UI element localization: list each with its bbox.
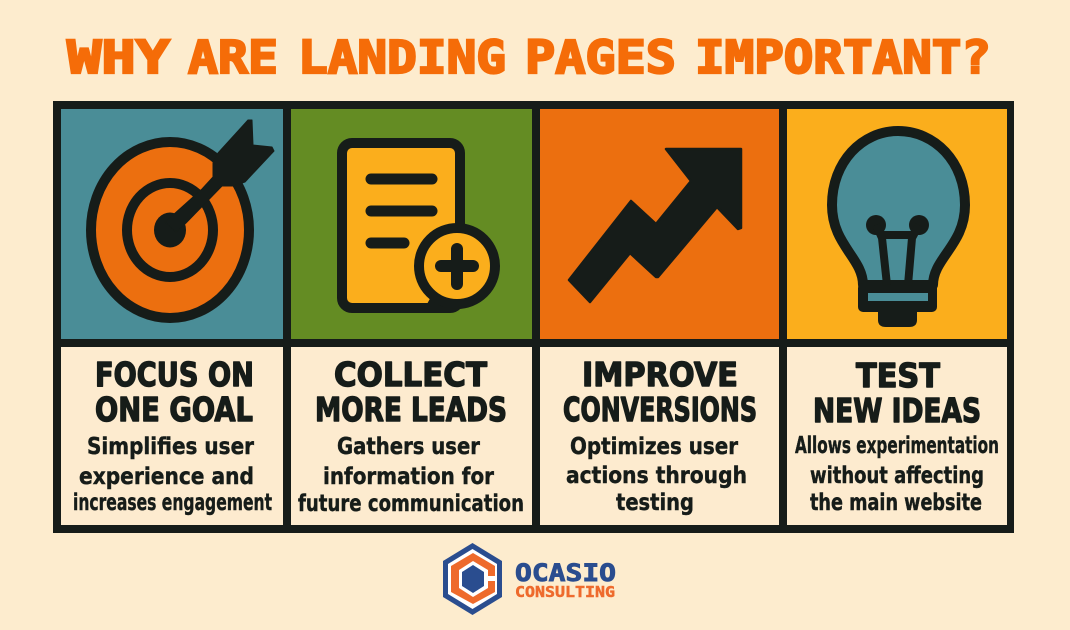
heading: focus on one goal: ONE GOAL <box>95 390 253 429</box>
heading: improve conversions: CONVERSIONS <box>563 390 757 429</box>
text: improve description <box>566 434 747 516</box>
wordmark: CONSULTING <box>515 583 615 601</box>
text: test description: without affecting <box>810 463 984 489</box>
text: focus description: increases engagement <box>73 490 272 516</box>
text: test description <box>795 433 999 516</box>
text: collect description: Gathers user <box>337 434 481 460</box>
title: LANDING <box>298 31 506 84</box>
text: collect description: future communication <box>298 491 524 517</box>
panel: test new ideas <box>787 109 1007 525</box>
text: focus description <box>73 434 272 516</box>
icon: rising arrow <box>569 149 741 302</box>
text: focus description: experience and <box>79 464 254 490</box>
heading: collect more leads: MORE LEADS <box>315 390 507 429</box>
icon: light bulb <box>832 131 965 327</box>
heading: focus on one goal <box>95 355 254 429</box>
title: PAGES <box>525 31 676 84</box>
heading: collect more leads <box>315 355 507 429</box>
panel: improve conversions <box>540 109 779 525</box>
text: collect description: information for <box>323 464 495 490</box>
text: improve description: testing <box>616 490 694 516</box>
wordmark <box>515 559 616 601</box>
title: IMPORTANT? <box>695 31 991 84</box>
text: test description: the main website <box>810 490 982 516</box>
heading: improve conversions <box>563 355 757 429</box>
panel: collect more leads <box>291 109 532 525</box>
infographic frame <box>53 101 1014 533</box>
title <box>67 31 991 84</box>
heading: test new ideas <box>813 356 981 430</box>
wordmark: OCASIO <box>515 559 616 587</box>
title: WHY <box>67 31 170 84</box>
text: improve description: actions through <box>566 463 747 489</box>
heading: collect more leads: COLLECT <box>334 355 487 394</box>
text: focus description: Simplifies user <box>87 434 255 460</box>
icon: target with arrow <box>91 120 274 318</box>
heading: test new ideas: TEST <box>856 356 940 395</box>
heading: improve conversions: IMPROVE <box>582 355 738 394</box>
title: ARE <box>188 31 278 84</box>
icon: hexagon mark <box>443 543 502 615</box>
logo: Ocasio Consulting <box>443 543 616 615</box>
heading: test new ideas: NEW IDEAS <box>813 391 981 430</box>
text: collect description <box>298 434 524 517</box>
icon: document with plus <box>342 143 495 308</box>
text: improve description: Optimizes user <box>570 434 739 460</box>
panel: focus on one goal <box>61 109 283 525</box>
heading: focus on one goal: FOCUS ON <box>95 355 254 394</box>
